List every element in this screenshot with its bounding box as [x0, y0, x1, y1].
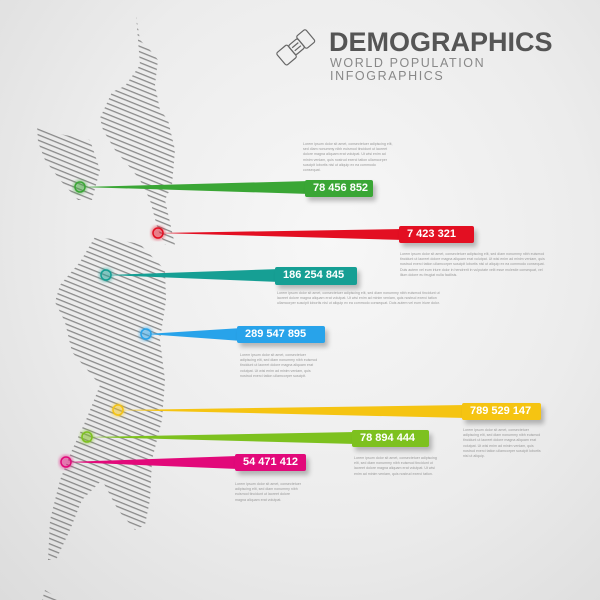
label: blue [237, 326, 325, 343]
label: red [399, 226, 474, 243]
text: red: Lorem ipsum dolor sit amet, consectetuer adipiscing elit, sed diam nonummy nibh euismod tincidunt ut laoreet dolore magna aliquam erat volutpat. Ut wisi enim ad minim veniam, quis nostrud exerci tation ullamcorper suscipit lobortis nisl ut aliquip ex ea commodo consequat. Duis autem vel eum iriure dolor in hendrerit in vulputate velit esse molestie consequat, vel illum dolore eu feugiat nulla facilisis. [400, 252, 545, 277]
text: teal: Lorem ipsum dolor sit amet, consectetuer adipiscing elit, sed diam nonummy nibh euismod tincidunt ut laoreet dolore magna aliquam erat volutpat. Ut wisi enim ad minim veniam, quis nostrud exerci tation ullamcorper suscipit lobortis nisl ut aliquip ex ea commodo consequat. Duis autem vel eum iriure dolor. [277, 291, 440, 305]
text: blue: Lorem ipsum dolor sit amet, consectetuer adipiscing elit, sed diam nonummy nibh euismod tincidunt ut laoreet dolore magna aliquam erat volutpat. Ut wisi enim ad minim veniam, quis nostrud exerci tation ullamcorper suscipit. [240, 353, 317, 378]
label: green: 78 456 852 [313, 182, 368, 194]
subtitle: INFOGRAPHICS [330, 69, 444, 83]
subtitle [330, 56, 485, 83]
bar: yellow [111, 403, 466, 418]
bar: magenta [59, 455, 238, 469]
icon: handshake fist [276, 29, 315, 66]
label: blue: 289 547 895 [245, 328, 306, 340]
subtitle: WORLD POPULATION [330, 56, 485, 70]
bar: red [151, 226, 404, 240]
text: yellow: Lorem ipsum dolor sit amet, consectetuer adipiscing elit, sed diam nonummy nibh euismod tincidunt ut laoreet dolore magna aliquam erat volutpat. Ut wisi enim ad minim veniam, quis nostrud exerci tation ullamcorper suscipit lobortis nisl ut aliquip. [463, 428, 541, 458]
label: lime: 78 894 444 [360, 432, 415, 444]
label: yellow: 789 529 147 [470, 405, 531, 417]
label: teal [275, 267, 357, 285]
label: magenta: 54 471 412 [243, 456, 298, 468]
text: green: Lorem ipsum dolor sit amet, consectetuer adipiscing elit, sed diam nonummy nibh euismod tincidunt ut laoreet dolore magna aliquam erat volutpat. Ut wisi enim ad minim veniam, quis nostrud exerci tation ullamcorper suscipit lobortis nisl ut aliquip ex ea commodo consequat. [303, 142, 392, 172]
bar: blue [139, 327, 242, 341]
label: magenta [235, 454, 306, 471]
label: teal: 186 254 845 [283, 269, 344, 281]
label: green [305, 180, 373, 197]
bar: lime [80, 430, 356, 444]
bar: green [73, 180, 310, 194]
label: red: 7 423 321 [407, 228, 456, 240]
world map (stripes) [37, 15, 175, 600]
title: DEMOGRAPHICS [329, 27, 553, 57]
text: magenta: Lorem ipsum dolor sit amet, consectetuer adipiscing elit, sed diam nonummy nibh euismod tincidunt ut laoreet dolore magna aliquam erat volutpat. [235, 482, 301, 502]
text: lime: Lorem ipsum dolor sit amet, consectetuer adipiscing elit, sed diam nonummy nibh euismod tincidunt ut laoreet dolore magna aliquam erat volutpat. Ut wisi enim ad minim veniam, quis nostrud exerci tation. [354, 456, 437, 476]
label: yellow [462, 403, 541, 420]
bar: teal [99, 268, 280, 282]
label: lime [352, 430, 429, 447]
